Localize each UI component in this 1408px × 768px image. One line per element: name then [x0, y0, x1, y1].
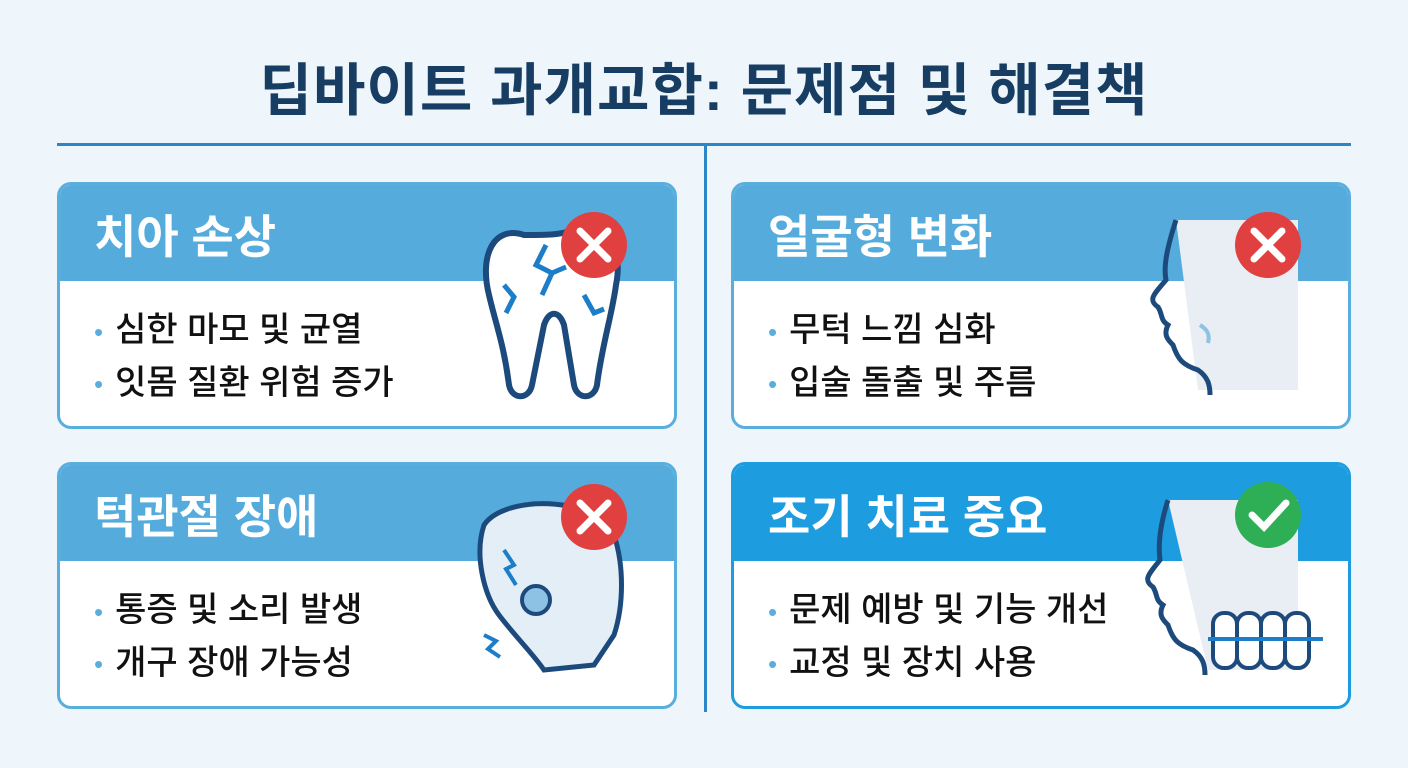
heading: early treatment: 조기 치료 중요 — [768, 491, 1047, 543]
panel: early treatment — [731, 462, 1351, 709]
icon: face profile — [1150, 212, 1301, 395]
bullet list: early treatment: 문제 예방 및 기능 개선 — [789, 591, 1108, 629]
heading: face change: 얼굴형 변화 — [768, 211, 992, 263]
icon: skull jaw — [477, 484, 627, 673]
panel: face change — [731, 182, 1351, 429]
bullet list: early treatment: 교정 및 장치 사용 — [789, 644, 1036, 682]
title: 딥바이트 과개교합: 문제점 및 해결책 — [260, 59, 1148, 123]
panel: TMJ disorder — [57, 462, 677, 709]
bullet list: TMJ disorder — [95, 591, 362, 682]
heading: early treatment — [734, 465, 1348, 561]
heading: TMJ disorder — [60, 465, 674, 561]
icon: profile with braces — [1145, 482, 1323, 675]
bullet list: face change — [769, 311, 1036, 402]
bullet list: early treatment — [769, 591, 1108, 682]
bullet list: tooth damage — [95, 311, 394, 402]
bullet list: TMJ disorder: 개구 장애 가능성 — [115, 644, 353, 682]
bullet list: face change: 무턱 느낌 심화 — [789, 311, 996, 349]
heading: tooth damage: 치아 손상 — [94, 211, 276, 263]
heading: face change — [734, 185, 1348, 281]
bullet list: tooth damage: 심한 마모 및 균열 — [115, 311, 362, 349]
icon: cracked tooth — [482, 212, 627, 400]
heading: tooth damage — [60, 185, 674, 281]
heading: TMJ disorder: 턱관절 장애 — [94, 491, 318, 543]
bullet list: tooth damage: 잇몸 질환 위험 증가 — [115, 364, 394, 402]
bullet list: TMJ disorder: 통증 및 소리 발생 — [115, 591, 362, 629]
panel: tooth damage — [57, 182, 677, 429]
bullet list: face change: 입술 돌출 및 주름 — [789, 364, 1036, 402]
